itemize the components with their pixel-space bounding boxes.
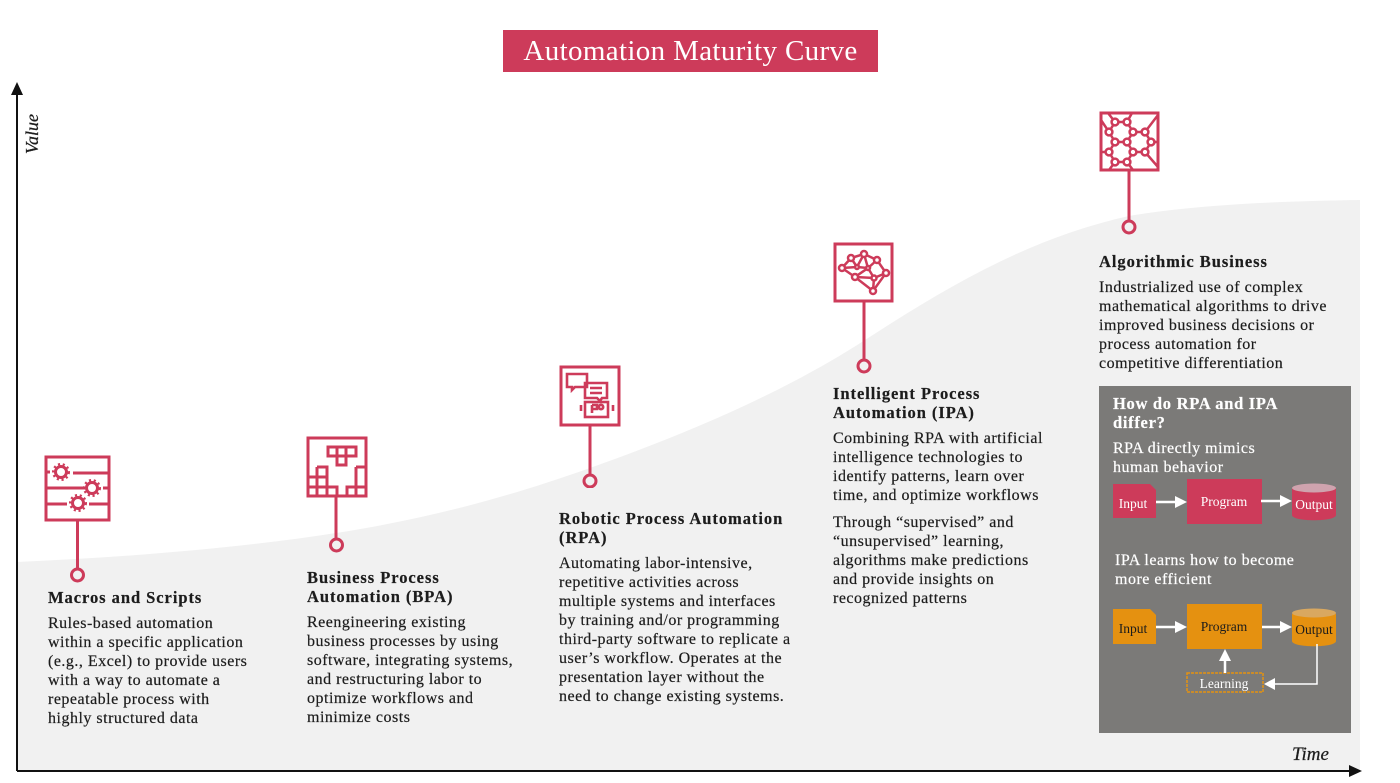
text: business process automation: Business Process xyxy=(307,568,440,587)
text: macros and scripts: Rules-based automation xyxy=(48,615,213,632)
text: business process automation: Reengineering existing xyxy=(307,614,466,631)
text: intelligent process automation: “unsupervised” learning, xyxy=(833,533,1004,550)
RPA description xyxy=(1113,440,1255,476)
RPA flow: Program xyxy=(1201,494,1248,509)
text: robotic process automation: (RPA) xyxy=(559,528,607,547)
text: algorithmic business: Algorithmic Business xyxy=(1099,252,1268,271)
icon: macros and scripts xyxy=(44,456,110,582)
text: intelligent process automation: algorithms make predictions xyxy=(833,552,1029,569)
text: algorithmic business xyxy=(1099,252,1327,372)
text: macros and scripts: with a way to automate a xyxy=(48,672,220,689)
text: business process automation xyxy=(306,568,513,726)
panel: how do RPA and IPA differ xyxy=(1099,386,1351,733)
text: robotic process automation: presentation layer without the xyxy=(559,669,765,686)
panel heading: differ? xyxy=(1113,413,1166,432)
text: business process automation: and restructuring labor to xyxy=(307,671,482,688)
text: intelligent process automation: and provide insights on xyxy=(833,571,994,588)
text: intelligent process automation: Intelligent Process xyxy=(833,384,980,403)
flow diagrams xyxy=(1113,479,1336,693)
text: macros and scripts: Macros and Scripts xyxy=(48,588,202,607)
title: Automation Maturity Curve xyxy=(523,35,858,67)
text: macros and scripts: highly structured data xyxy=(48,710,199,727)
icon: intelligent process automation xyxy=(834,242,894,374)
text: algorithmic business: competitive differentiation xyxy=(1099,355,1283,372)
text: business process automation: Automation (BPA) xyxy=(307,587,453,606)
text: robotic process automation: user’s workflow. Operates at the xyxy=(559,650,782,667)
value axis xyxy=(11,82,23,771)
text: macros and scripts: repeatable process with xyxy=(48,691,210,708)
text: robotic process automation xyxy=(558,509,791,705)
IPA description: more efficient xyxy=(1115,571,1212,588)
text: algorithmic business: improved business decisions or xyxy=(1099,317,1314,334)
time axis label: Time xyxy=(1292,744,1329,765)
text: business process automation: software, integrating systems, xyxy=(307,652,513,669)
text: robotic process automation: multiple systems and interfaces xyxy=(559,593,776,610)
text: algorithmic business: mathematical algorithms to drive xyxy=(1099,298,1327,315)
time axis xyxy=(17,765,1362,777)
panel heading: How do RPA and IPA xyxy=(1113,394,1278,413)
icon: robotic process automation xyxy=(560,366,620,488)
RPA flow xyxy=(1113,479,1336,524)
icon: algorithmic business xyxy=(1100,112,1160,234)
text: macros and scripts: within a specific application xyxy=(48,634,243,651)
text: intelligent process automation: identify patterns, learn over xyxy=(833,468,1024,485)
RPA description: human behavior xyxy=(1113,459,1224,476)
IPA flow: Input xyxy=(1119,621,1147,636)
text: macros and scripts xyxy=(48,588,247,727)
text: business process automation: minimize costs xyxy=(307,709,410,726)
text: robotic process automation: third-party software to replicate a xyxy=(559,631,791,648)
IPA flow: Program xyxy=(1201,619,1248,634)
text: intelligent process automation: recognized patterns xyxy=(833,590,967,607)
text: robotic process automation: repetitive activities across xyxy=(559,574,739,591)
title xyxy=(503,30,878,72)
text: intelligent process automation: Through “supervised” and xyxy=(833,514,1014,531)
text: robotic process automation: Automating labor-intensive, xyxy=(559,555,753,572)
RPA flow: Output xyxy=(1295,497,1333,512)
text: intelligent process automation xyxy=(833,384,1043,607)
text: robotic process automation: Robotic Process Automation xyxy=(559,509,783,528)
IPA flow: Output xyxy=(1295,622,1333,637)
icon: business process automation xyxy=(306,436,368,552)
panel heading xyxy=(1113,394,1278,432)
text: robotic process automation: by training and/or programming xyxy=(559,612,780,629)
curve area xyxy=(17,200,1360,771)
text: intelligent process automation: time, and optimize workflows xyxy=(833,487,1039,504)
text: algorithmic business: Industrialized use of complex xyxy=(1099,279,1303,296)
IPA description: IPA learns how to become xyxy=(1115,552,1294,569)
text: robotic process automation: need to change existing systems. xyxy=(559,688,784,705)
text: intelligent process automation: Combining RPA with artificial xyxy=(833,430,1043,447)
text: algorithmic business: process automation for xyxy=(1099,336,1257,353)
IPA flow xyxy=(1113,604,1336,692)
text: business process automation: business processes by using xyxy=(307,633,499,650)
text: macros and scripts: (e.g., Excel) to provide users xyxy=(48,653,247,670)
text: intelligent process automation: intelligence technologies to xyxy=(833,449,1023,466)
value axis label: Value xyxy=(22,114,42,154)
IPA description xyxy=(1115,552,1294,588)
text: intelligent process automation: Automation (IPA) xyxy=(833,403,975,422)
RPA description: RPA directly mimics xyxy=(1113,440,1255,457)
IPA flow: Learning xyxy=(1200,676,1249,691)
RPA flow: Input xyxy=(1119,496,1147,511)
text: business process automation: optimize workflows and xyxy=(307,690,474,707)
